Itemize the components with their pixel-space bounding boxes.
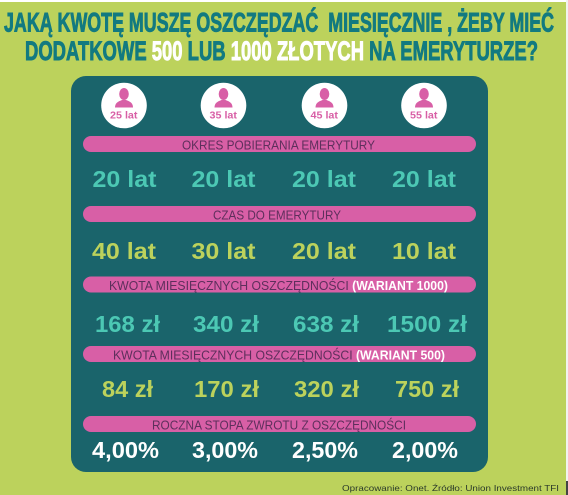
icon: 45 lat: 45 lat	[310, 110, 339, 122]
values: okres pobierania: 20 lat	[192, 166, 256, 192]
values: wariant 1000: 340 zł	[193, 311, 260, 337]
values: czas do emerytury: 30 lat	[192, 238, 256, 264]
values: czas do emerytury: 40 lat	[92, 238, 156, 264]
heading bar: roczna stopa zwrotu: ROCZNA STOPA ZWROTU Z OSZCZĘDNOŚCI	[152, 418, 406, 432]
values: czas do emerytury: 10 lat	[392, 238, 456, 264]
values: stopa zwrotu	[92, 437, 458, 463]
icon: 55 lat: 55 lat	[410, 110, 438, 122]
values: wariant 500	[102, 376, 460, 402]
values: stopa zwrotu: 2,00%	[392, 437, 458, 463]
values: wariant 500: 170 zł	[194, 376, 260, 402]
values: stopa zwrotu: 4,00%	[92, 437, 159, 463]
source note: Opracowanie: Onet. Źródło: Union Investment TFI	[342, 483, 559, 493]
heading bar: wariant 500: KWOTA MIESIĘCZNYCH OSZCZĘDNOŚCI (WARIANT 500)	[113, 348, 445, 362]
icon: 35 lat	[201, 83, 246, 128]
values: wariant 1000: 168 zł	[95, 311, 161, 337]
values: okres pobierania: 20 lat	[92, 166, 157, 192]
values: stopa zwrotu: 2,50%	[292, 437, 358, 463]
icon: 45 lat	[302, 83, 347, 128]
values: czas do emerytury	[92, 238, 456, 264]
heading bar: roczna stopa zwrotu	[83, 416, 476, 432]
heading bar: czas do emerytury: CZAS DO EMERYTURY	[213, 208, 342, 222]
values: wariant 500: 84 zł	[102, 376, 154, 402]
heading bar: okres pobierania emerytury	[83, 136, 476, 152]
heading bar: czas do emerytury	[83, 206, 476, 222]
values: stopa zwrotu: 3,00%	[192, 437, 258, 463]
icon: 35 lat: 35 lat	[210, 110, 238, 122]
icon: 55 lat	[401, 83, 447, 128]
values: okres pobierania: 20 lat	[392, 166, 456, 192]
values: wariant 1000: 638 zł	[293, 311, 360, 337]
heading bar: okres pobierania emerytury: OKRES POBIERANIA EMERYTURY	[182, 138, 376, 152]
values: wariant 500: 320 zł	[294, 376, 360, 402]
values: czas do emerytury: 20 lat	[292, 238, 356, 264]
values: wariant 500: 750 zł	[395, 376, 460, 402]
values: wariant 1000	[95, 311, 468, 337]
values: okres pobierania	[92, 166, 456, 192]
icon: 25 lat: 25 lat	[110, 110, 138, 122]
icon: 25 lat	[101, 83, 147, 128]
panel: table	[71, 76, 488, 472]
heading bar: wariant 1000: KWOTA MIESIĘCZNYCH OSZCZĘDNOŚCI (WARIANT 1000)	[109, 278, 448, 293]
values: wariant 1000: 1500 zł	[387, 311, 468, 337]
title	[4, 8, 554, 66]
values: okres pobierania: 20 lat	[292, 166, 356, 192]
